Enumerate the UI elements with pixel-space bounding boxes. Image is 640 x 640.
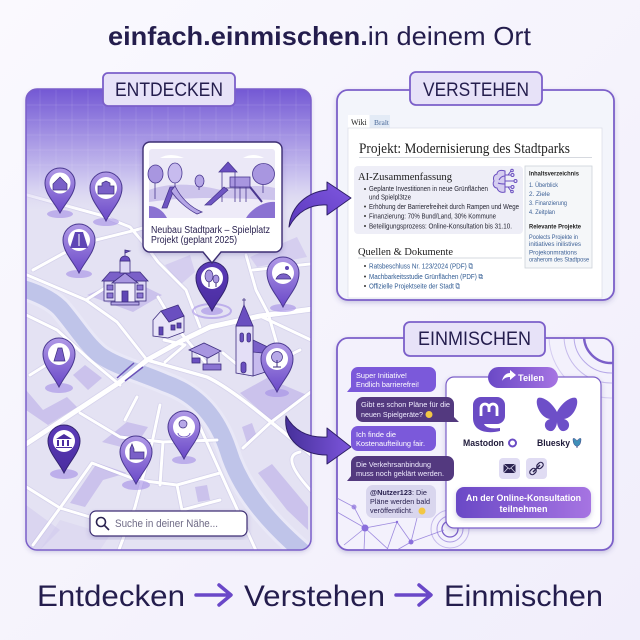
step: einmischen: Einmischen <box>444 580 603 613</box>
pin: museum <box>48 425 80 479</box>
sidebar: contents: Poolects Projekte in <box>529 234 578 241</box>
AI summary box <box>354 166 523 234</box>
sources section: Ratsbeschluss Nr. 123/2024 (PDF) ⧉ <box>369 262 473 270</box>
building: house <box>153 305 184 338</box>
button: online consultation <box>456 487 591 518</box>
comment bubble 5: @Nutzer123: Die <box>370 488 427 497</box>
step: entdecken: Entdecken <box>37 580 185 613</box>
sidebar: contents: Projekonmrations <box>529 250 577 256</box>
comment bubble 4: Die Verkehrsanbindung <box>356 460 431 469</box>
heading: einmischen <box>404 322 545 356</box>
roads <box>20 193 320 555</box>
pin: hill <box>267 257 299 312</box>
illustration: playground <box>148 149 275 218</box>
pin: school <box>90 172 122 226</box>
wiki tabs: Wiki <box>351 118 367 127</box>
arrow: step 2 to 3 <box>396 585 431 605</box>
button: online consultation: An der Online-Konsultation <box>466 493 581 503</box>
comment bubble 2: neuen Spielgeräte? <box>361 410 423 419</box>
icon: mastodon <box>473 397 505 432</box>
label: mastodon: Mastodon <box>463 438 504 448</box>
heading: verstehen <box>410 72 542 105</box>
network nodes <box>352 504 414 544</box>
arrow: step 1 to 2 <box>196 585 231 605</box>
footer flow <box>37 580 603 613</box>
sidebar: contents: oraherom des Stadtpose <box>529 256 589 264</box>
sources section: Machbarkeitsstudie Grünflächen (PDF) ⧉ <box>369 272 483 281</box>
comment bubble 2 <box>356 397 459 422</box>
comment bubble 5 <box>366 485 436 518</box>
sidebar: contents: Inhaltsverzeichnis <box>529 170 579 178</box>
AI summary box: und Spielpl3tze <box>369 192 411 202</box>
button: teilen <box>488 367 558 388</box>
pins on the map <box>43 168 299 490</box>
sidebar: contents: 2. Ziele <box>529 191 550 198</box>
wiki title: Projekt: Modernisierung des Stadtparks <box>359 141 570 157</box>
bridge <box>117 363 143 381</box>
pin: house <box>45 168 75 218</box>
search bar <box>90 511 247 536</box>
callout text: Neubau Stadtpark – Spielplatz <box>151 225 270 236</box>
wiki page <box>348 128 602 298</box>
panel: entdecken map <box>18 89 320 558</box>
arrow: map to participation <box>286 416 351 464</box>
building: church <box>236 298 272 376</box>
AI summary box: Beteiligungsprozess: Online-Konsultation bis 31.10. <box>369 222 512 230</box>
AI summary box: Geplante Investitionen in neue Grünflächen <box>369 184 488 193</box>
icon: email button <box>499 458 520 479</box>
heading: entdecken <box>103 73 235 106</box>
sidebar: contents: initiatives inilistives <box>529 241 581 248</box>
map blocks <box>26 237 308 550</box>
building: school <box>102 250 148 305</box>
icon: AI brain <box>493 169 517 193</box>
label: bluesky: Bluesky <box>537 438 570 448</box>
sources section: Offizielle Projektseite der Stadt ⧉ <box>369 282 460 290</box>
river water <box>18 287 310 558</box>
wiki tabs: Bralt <box>374 118 390 127</box>
sidebar: contents: Relevante Projekte <box>529 224 581 230</box>
comment bubble 1: Endlich barrierefrei! <box>356 380 419 389</box>
icon: magnifier <box>96 518 109 530</box>
comment bubble 4: muss noch geklärt werden. <box>356 469 444 478</box>
pin: featured park <box>193 262 231 318</box>
wiki tabs <box>348 115 390 129</box>
comment bubble 3: Kostenaufteilung fair. <box>356 439 425 448</box>
AI summary box: AI-Zusammenfassung <box>358 171 452 183</box>
icon: link button <box>526 458 547 479</box>
icon: mini mastodon <box>509 440 516 446</box>
sky fade <box>26 89 311 211</box>
pin: microphone <box>168 411 200 464</box>
heading: einmischen: EINMISCHEN <box>418 329 531 350</box>
search placeholder: Suche in deiner Nähe... <box>115 518 218 530</box>
comment bubble 3: Ich finde die <box>356 430 396 439</box>
sidebar: contents <box>525 166 592 268</box>
pin: construction <box>43 338 75 393</box>
step: verstehen: Verstehen <box>244 580 385 613</box>
pin: road <box>63 224 95 278</box>
sidebar: contents: 3. Finanzierung <box>529 200 567 207</box>
AI summary box: Erhöhung der Barrierefreiheit durch Rampen und Wege <box>369 202 519 211</box>
title: einfach.einmischen. in deinem Ort <box>108 21 532 51</box>
callout: park project: Projekt (geplant 2025) <box>151 235 237 246</box>
panel: verstehen wiki <box>337 90 614 300</box>
button: online consultation: teilnehmen <box>500 504 548 514</box>
sources section: Quellen & Dokumente <box>358 246 453 258</box>
AI summary box: Finanzierung: 70% Bund/Land, 30% Kommune <box>369 212 496 220</box>
comment bubble 1 <box>347 367 436 392</box>
pin: tree <box>261 343 293 397</box>
sources section <box>358 246 522 290</box>
comment bubble 3 <box>351 426 436 451</box>
arrow: map to wiki <box>289 182 351 227</box>
sidebar: contents: 4. Zeitplan <box>529 209 555 216</box>
heading: entdecken: ENTDECKEN <box>115 80 223 101</box>
comment bubble 2: Gibt es schon Pläne für die <box>361 400 450 409</box>
comment bubble 5: veröffentlicht. <box>370 506 413 515</box>
comment bubble 4 <box>347 456 454 481</box>
comment bubble 1: Super Initiative! <box>356 371 407 380</box>
share card <box>446 367 601 528</box>
icon: mini butterfly <box>573 438 581 448</box>
river <box>18 287 310 558</box>
button: teilen: Teilen <box>518 373 544 384</box>
heading: verstehen: VERSTEHEN <box>423 80 529 101</box>
pin: church <box>120 436 152 490</box>
sidebar: contents: 1. Überblick <box>529 181 559 189</box>
comment bubble 5: Pläne werden bald <box>370 497 430 506</box>
panel: einmischen <box>334 336 616 556</box>
icon: bluesky butterfly <box>537 398 577 431</box>
building: market stall <box>189 343 221 370</box>
decorative ripples and network <box>337 338 613 550</box>
callout: park project <box>143 142 282 263</box>
